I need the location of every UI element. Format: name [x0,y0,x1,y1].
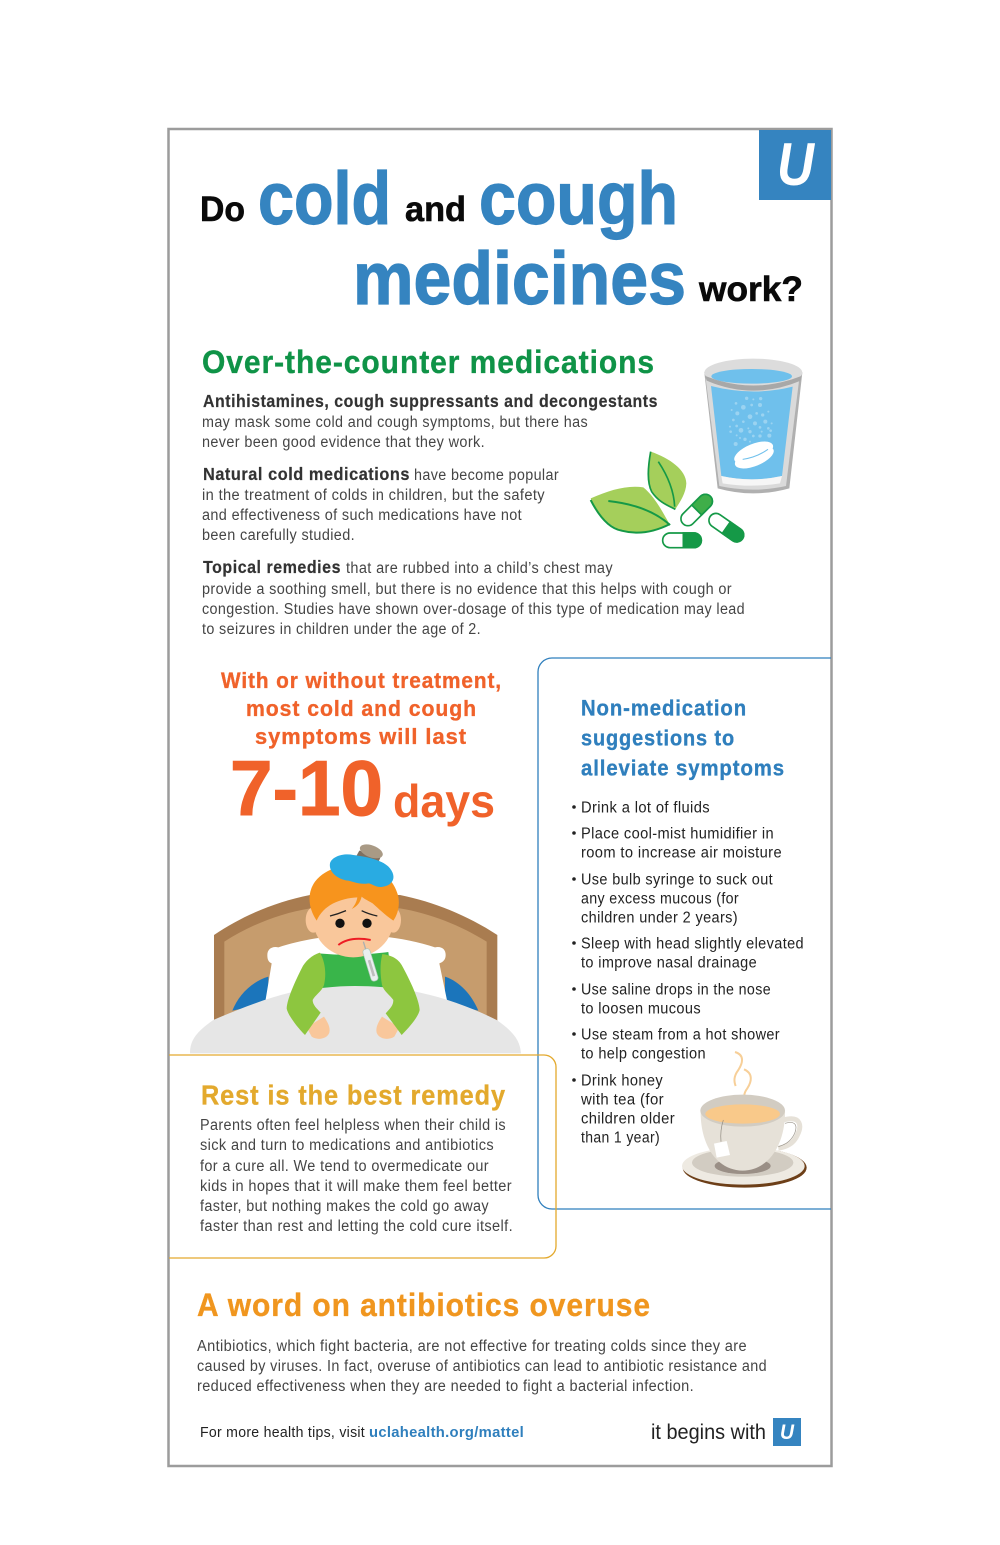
heading: non-medication suggestions: suggestions to [581,726,735,750]
text block: rest: for a cure all. We tend to overmedicate our [200,1158,489,1175]
list: suggestions: Place cool-mist humidifier in [581,826,774,842]
list: suggestions: any excess mucous (for [581,890,739,908]
list: suggestions: Use saline drops in the nose [581,982,771,998]
callout: symptom duration: With or without treatment, [221,668,502,693]
blue pillows [232,977,268,1011]
text block: topical remedies [202,557,745,638]
text block: rest: faster, but nothing makes the cold go away [200,1198,489,1215]
text block: antibiotics [197,1338,767,1395]
list: suggestions: Drink honey [581,1072,663,1090]
text block: topical remedies: provide a soothing smell, but there is no evidence that this helps with cough or [202,581,732,598]
footer: health tips link: For more health tips, visit [200,1424,365,1441]
page frame [168,129,832,1466]
eyes [335,919,345,928]
text block: rest: faster than rest and letting the cold cure itself. [200,1218,513,1235]
icon: top leaf [648,452,686,509]
footer: it begins with U [651,1418,801,1446]
illustration: sick boy in bed [190,842,521,1053]
text block: rest: Parents often feel helpless when their child is [200,1117,506,1134]
callout: symptom duration: most cold and cough [246,696,477,721]
heading: non-medication suggestions: alleviate symptoms [581,756,785,780]
title: cough [479,157,678,240]
title [200,157,803,320]
list: suggestions: to improve nasal drainage [581,954,757,972]
logo: U badge: U [777,131,815,198]
text block: topical remedies: congestion. Studies have shown over-dosage of this type of medication may lead [202,601,745,618]
list: suggestions: children older [581,1110,675,1128]
ice bag cap [356,842,385,866]
footer: it begins with U: U [780,1421,795,1444]
hands [307,1017,330,1039]
callout: symptom duration: 7-10 [230,744,383,832]
callout: symptom duration [221,668,502,832]
panel: non-medication suggestions [538,658,831,1209]
icon: glass [704,359,802,493]
list: suggestions: Sleep with head slightly elevated [581,936,804,952]
text block: antihistamines [202,391,658,451]
cup [701,1111,785,1171]
shirt [317,952,393,990]
headboard [214,895,497,1022]
steam [734,1052,742,1086]
icon: bubbles [729,397,773,446]
face [313,883,393,957]
icon: glass with tablet, leaves and capsules [591,359,802,548]
text block: natural cold medications: Natural cold medications [203,464,410,484]
mouth [338,939,371,945]
icon: cup of tea [682,1052,807,1188]
eyebrows [330,911,346,916]
ears [306,907,321,933]
list: suggestions: than 1 year) [581,1130,660,1146]
text block: natural cold medications: in the treatment of colds in children, but the safety [202,487,545,504]
text block: natural cold medications: been carefully studied. [202,527,355,544]
title: work? [698,270,803,309]
icon: tablet [731,437,777,473]
heading: non-medication suggestions [581,696,785,780]
list: suggestions: room to increase air moisture [581,844,782,862]
blanket [190,986,521,1053]
text block: antihistamines: never been good evidence that they work. [202,434,485,451]
handle [778,1119,800,1148]
list: suggestions: Use steam from a hot shower [581,1026,780,1044]
heading: a word on antibiotics overuse: A word on antibiotics overuse [197,1287,651,1323]
list: suggestions [572,800,804,1146]
footer: health tips link [200,1424,524,1441]
logo: U badge [759,130,831,200]
text block: topical remedies: to seizures in children under the age of 2. [202,621,481,638]
list: suggestions: with tea (for [580,1092,664,1108]
icon: capsules [663,491,746,548]
list: suggestions: to loosen mucous [581,1000,701,1018]
heading: rest is the best remedy: Rest is the best remedy [201,1080,506,1110]
footer: it begins with U: it begins with [651,1421,766,1444]
text block: natural cold medications [202,464,559,544]
heading: non-medication suggestions: Non-medication [581,696,747,720]
saucer [683,1148,807,1188]
title: and [405,190,466,229]
title: medicines [353,237,686,320]
callout: symptom duration: symptoms will last [255,724,467,749]
list: suggestions: children under 2 years) [581,910,738,926]
text block: antibiotics: reduced effectiveness when they are needed to fight a bacterial infection. [197,1378,694,1395]
text block: natural cold medications: and effectiveness of such medications have not [202,507,522,524]
text block: antihistamines: Antihistamines, cough suppressants and decongestants [203,391,658,411]
footer: health tips link: uclahealth.org/mattel [369,1424,524,1441]
text block: rest [200,1117,513,1235]
thermometer [360,941,379,982]
panel: rest is the best remedy [169,1055,556,1258]
text block: natural cold medications: have become popular [414,467,559,484]
title: cold [258,157,391,240]
text block: antihistamines: may mask some cold and cough symptoms, but there has [202,414,588,431]
text block: rest: kids in hopes that it will make them feel better [200,1178,512,1195]
title: Do [200,190,245,229]
sleeves [287,953,325,1035]
list: suggestions: Drink a lot of fluids [581,800,710,816]
tea bag [721,1120,723,1142]
callout: symptom duration: days [393,775,495,827]
hair [310,865,399,921]
text block: rest: sick and turn to medications and antibiotics [200,1137,494,1154]
list: suggestions: Use bulb syringe to suck out [581,872,773,888]
text block: topical remedies: Topical remedies [203,557,341,577]
heading: over-the-counter medications: Over-the-counter medications [202,344,655,380]
text block: topical remedies: that are rubbed into a child’s chest may [346,560,613,577]
icon: bottom leaf [591,487,670,533]
text block: antibiotics: Antibiotics, which fight bacteria, are not effective for treating colds since they are [197,1338,747,1355]
list: suggestions: to help congestion [581,1046,706,1062]
ice bag [330,854,393,887]
white pillow [265,935,448,1003]
text block: antibiotics: caused by viruses. In fact, overuse of antibiotics can lead to antibiotic resistance and [197,1358,767,1375]
